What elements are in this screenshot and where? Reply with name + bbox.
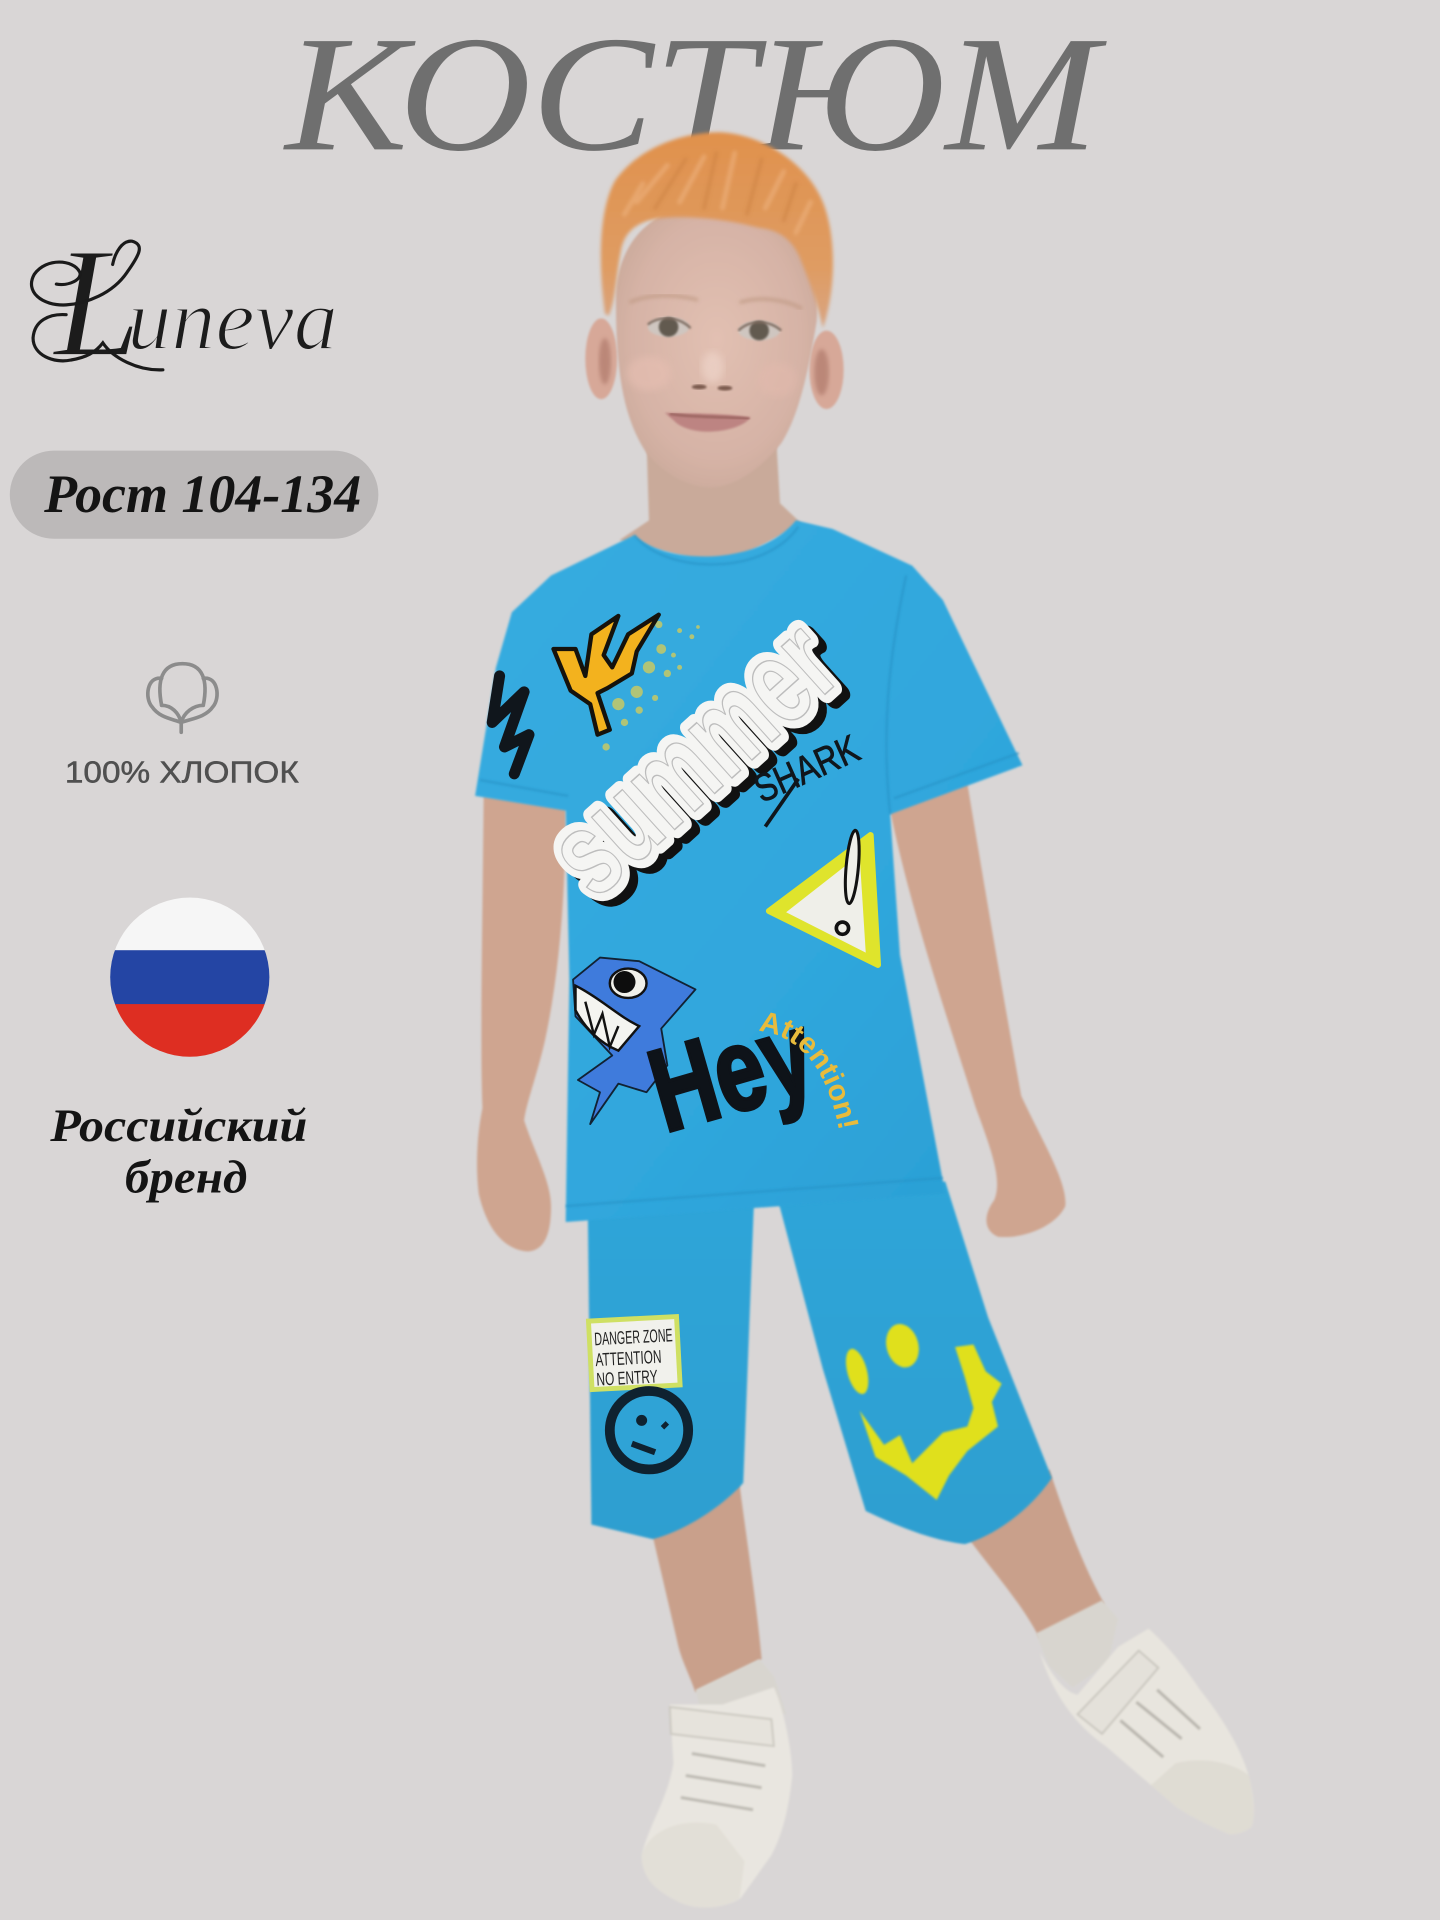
Russian brand label: бренд [125,1153,247,1204]
socks [696,1600,1118,1714]
cotton label: 100% ХЛОПОК [65,755,299,789]
Russian brand label: Российский [49,1101,307,1152]
brand logo: Luneva [31,215,338,389]
height badge [10,451,378,539]
print: warning triangle [769,830,878,965]
legs [651,1469,1104,1692]
eyes, brows, nose and mouth [627,296,802,432]
hair [601,132,833,328]
print: hey lettering: Hey [636,986,827,1157]
print: summer lettering: summer [529,599,871,926]
brand logo: Luneva: L [54,215,141,389]
title: КОСТЮМ [283,2,1108,185]
left sneaker [642,1687,792,1907]
print: shark scribble [748,727,866,827]
shorts patch: danger zone: NO ENTRY [596,1366,658,1390]
icon: Russian flag [104,898,276,1058]
shorts print: black smiley [610,1391,688,1469]
shorts [588,1182,1052,1544]
print: shark scribble: SHARK [748,727,866,811]
t-shirt [475,520,1022,1222]
shorts patch: danger zone: DANGER ZONE [594,1324,673,1349]
sleeve print: black scribble [492,676,529,774]
brand logo: Luneva: uneva [127,271,338,369]
print: summer lettering: summer [521,593,863,921]
Russian brand label [49,1101,307,1204]
right arm and hand [890,784,1065,1237]
shorts patch: danger zone [586,1314,683,1392]
print: palm and paint splatter [553,615,700,751]
height badge: Рост 104-134 [43,464,361,524]
neck [620,441,802,566]
face [616,202,817,487]
print: summer lettering: summer [521,593,863,921]
left arm and hand [477,796,566,1251]
shorts patch: danger zone: ATTENTION [595,1346,662,1370]
ears [585,318,844,409]
print: summer lettering [521,592,871,928]
right sneaker [1040,1629,1254,1834]
t-shirt seams and hem shading [480,527,1019,1206]
print: attention lettering: Attention! [759,1012,858,1128]
print: shark [573,958,696,1124]
icon: cotton boll [148,664,217,732]
boy wearing the suit [474,130,1248,1906]
shorts print: yellow smile [842,1320,1002,1500]
